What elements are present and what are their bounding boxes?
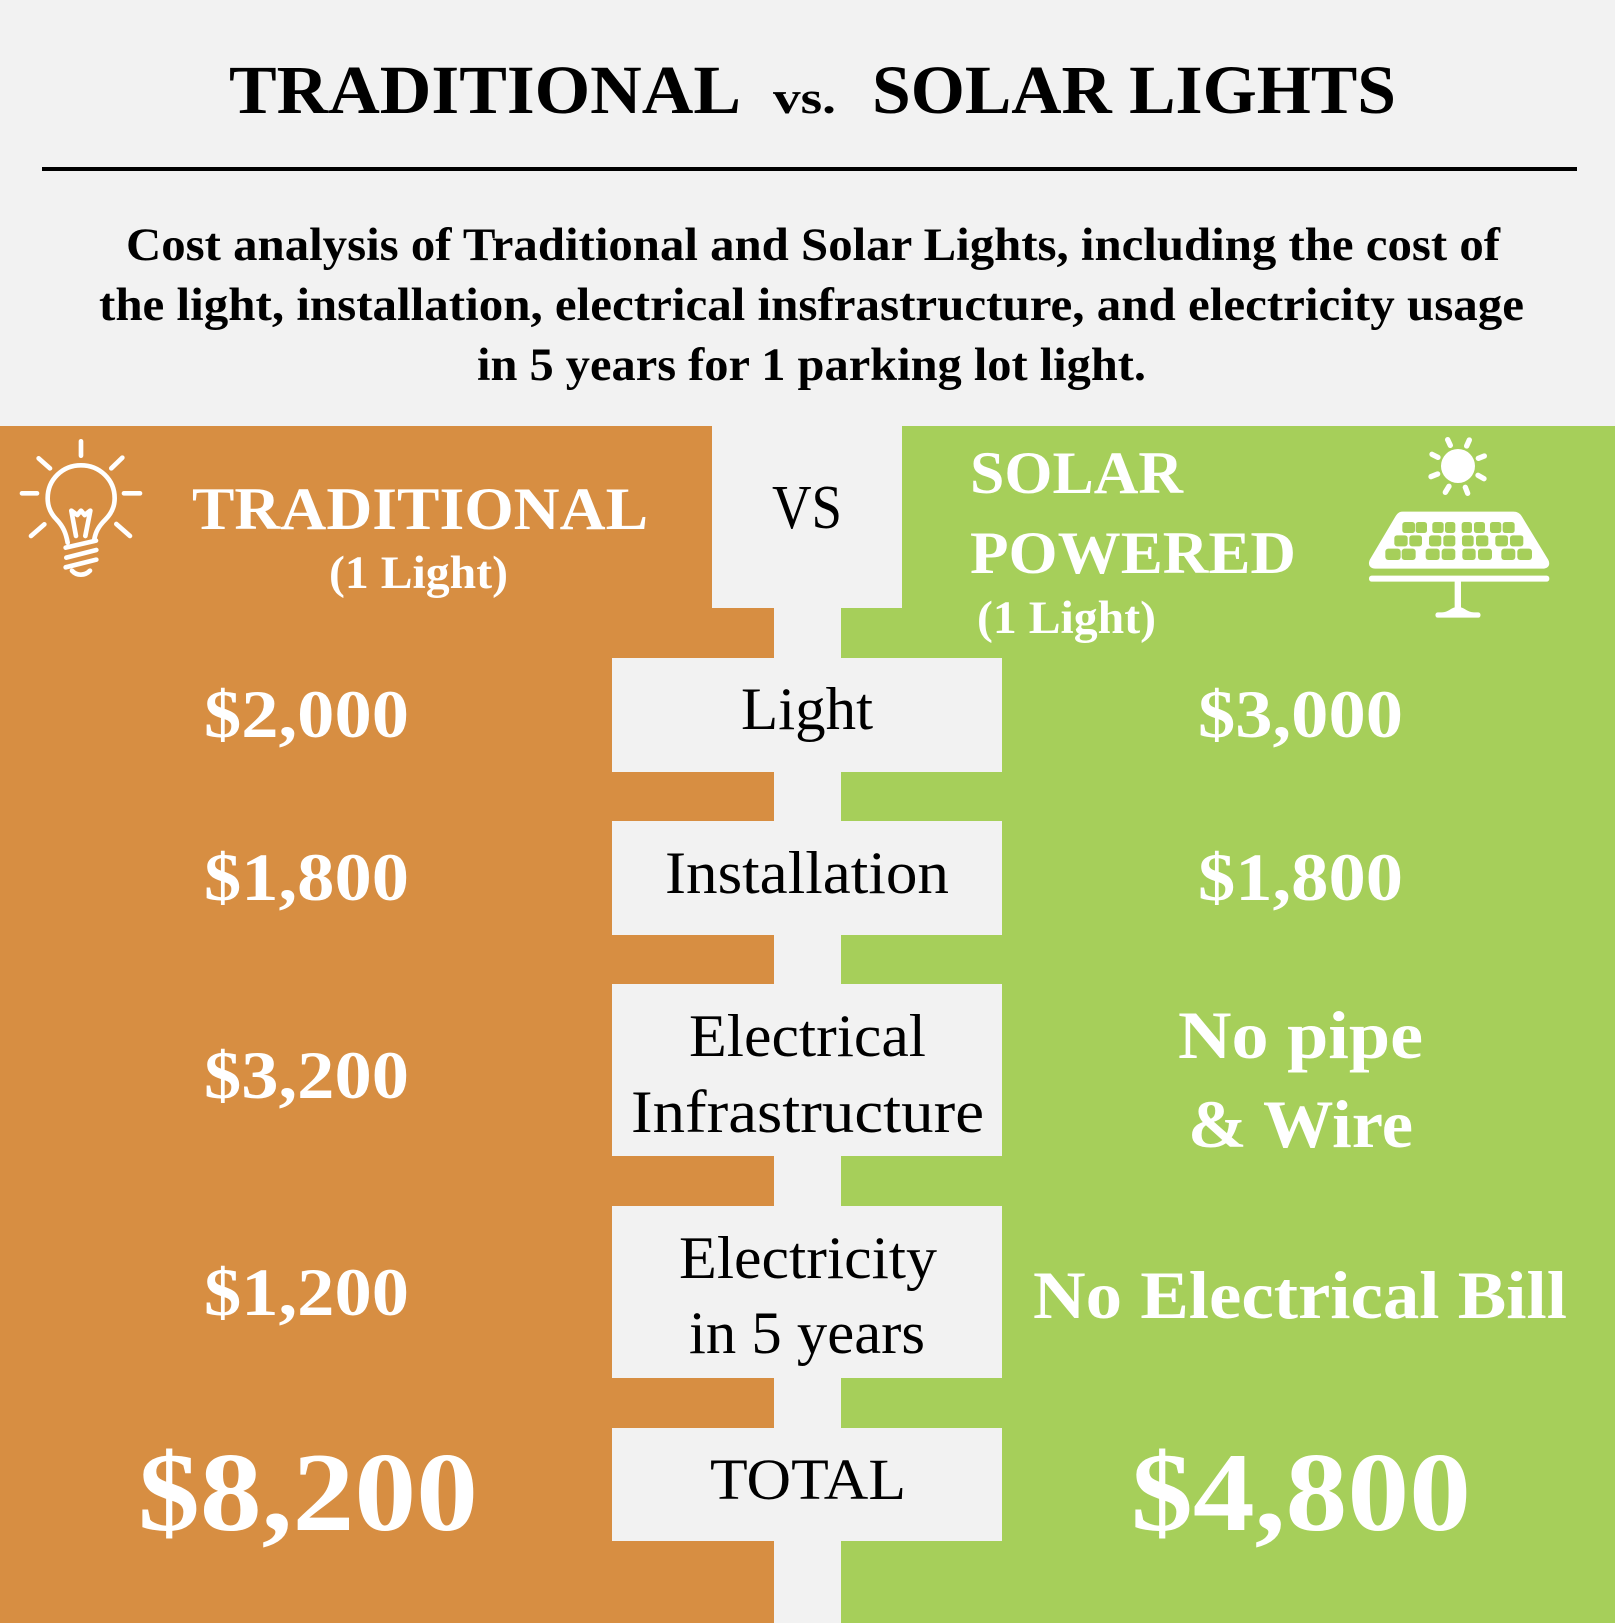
heading: solar powered: POWERED	[970, 520, 1296, 586]
row: electricity in 5 years: in 5 years	[689, 1300, 925, 1366]
intro text block: in 5 years for 1 parking lot light.	[477, 339, 1146, 391]
panel: traditional column	[0, 426, 774, 1623]
title: TRADITIONAL	[229, 52, 741, 128]
row: electrical infrastructure: Infrastructure	[631, 1079, 984, 1145]
row: electricity in 5 years: $1,200	[204, 1254, 409, 1330]
row: electricity in 5 years: Electricity	[679, 1225, 937, 1291]
row: electricity in 5 years: No Electrical Bill	[1033, 1257, 1567, 1333]
title	[229, 52, 1396, 128]
row: total: TOTAL	[710, 1447, 906, 1512]
row: electrical infrastructure: & Wire	[1188, 1086, 1413, 1162]
row: total: $4,800	[1131, 1431, 1471, 1555]
row: total: $8,200	[138, 1431, 478, 1555]
heading: solar powered	[970, 440, 1296, 644]
heading: vs: VS	[772, 474, 842, 542]
row: electrical infrastructure: Electrical	[689, 1003, 926, 1069]
row: electrical infrastructure	[204, 997, 1423, 1162]
heading: solar powered: (1 Light)	[977, 592, 1156, 644]
intro text block	[99, 219, 1524, 391]
intro text block: the light, installation, electrical insfrastructure, and electricity usage	[99, 279, 1524, 331]
row: light: $2,000	[204, 676, 409, 752]
row: electrical infrastructure: $3,200	[204, 1037, 409, 1113]
heading: traditional: TRADITIONAL	[192, 476, 648, 542]
row: light: Light	[741, 676, 873, 742]
title: SOLAR LIGHTS	[872, 52, 1396, 128]
row: electrical infrastructure: No pipe	[1178, 997, 1423, 1073]
row: installation: $1,800	[1198, 839, 1403, 915]
row: installation: $1,800	[204, 839, 409, 915]
row: light	[204, 676, 1403, 752]
intro text block: Cost analysis of Traditional and Solar Lights, including the cost of	[126, 219, 1501, 271]
heading: traditional	[192, 476, 648, 599]
row: total	[138, 1431, 1471, 1555]
row: light: $3,000	[1198, 676, 1403, 752]
row: installation: Installation	[665, 840, 949, 906]
heading: solar powered: SOLAR	[970, 440, 1184, 506]
icon: solar panel with sun	[1369, 440, 1549, 618]
row: electricity in 5 years	[204, 1225, 1567, 1366]
heading: traditional: (1 Light)	[329, 547, 508, 599]
row: installation	[204, 839, 1403, 915]
icon: light bulb	[22, 441, 140, 575]
title: vs.	[773, 72, 836, 123]
panel: solar column	[841, 426, 1615, 1623]
